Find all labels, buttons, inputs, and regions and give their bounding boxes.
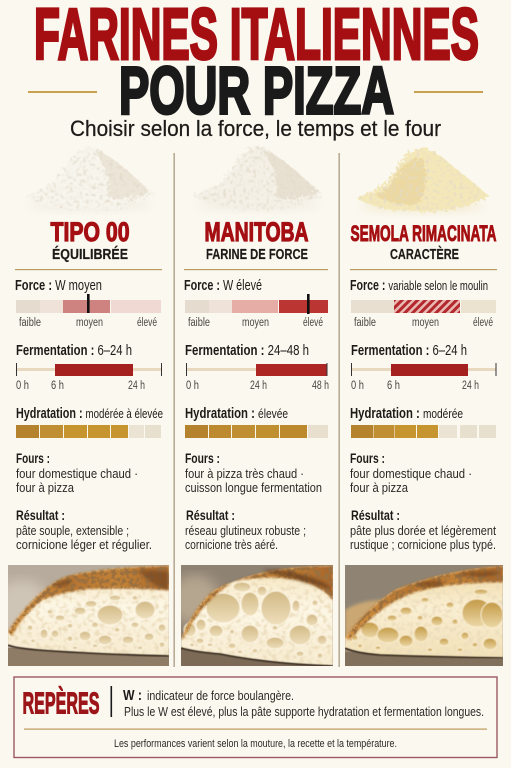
text: W definition: W :	[123, 688, 142, 704]
fermentation timeline: 0 h	[351, 380, 364, 392]
text: résultat	[16, 508, 152, 552]
panel: Manitoba	[170, 147, 333, 666]
icon: flour pile semola	[356, 148, 489, 212]
force gauge: élevé	[137, 317, 157, 329]
fermentation timeline: 24 h	[250, 380, 267, 392]
hydration bar	[16, 406, 163, 438]
name: Manitoba: MANITOBA	[204, 217, 308, 247]
subtitle: caractère: CARACTÈRE	[390, 246, 459, 263]
fermentation timeline: Fermentation : 6–24 h	[351, 343, 467, 359]
fermentation timeline: 48 h	[312, 380, 329, 392]
panel: Tipo 00	[0, 147, 169, 666]
image: bread manitoba	[181, 565, 333, 666]
force gauge	[350, 278, 496, 329]
hydration bar	[350, 406, 496, 438]
force gauge: faible	[354, 317, 376, 329]
text: fours: cuisson longue fermentation	[185, 480, 322, 495]
fermentation timeline: Fermentation : 24–48 h	[185, 343, 309, 359]
force gauge: Force : W moyen	[15, 278, 102, 294]
text: résultat	[185, 508, 306, 552]
text: résultat: cornicione léger et régulier.	[16, 537, 152, 552]
fermentation timeline: 6 h	[51, 380, 64, 392]
fermentation timeline: Fermentation : 6–24 h	[16, 343, 132, 359]
text: W definition: indicateur de force boulangère.	[147, 688, 294, 703]
text: résultat: Résultat :	[186, 508, 235, 523]
force gauge	[15, 278, 161, 329]
footnote: Les performances varient selon la mouture, la recette et la température.	[114, 738, 397, 750]
text: fours	[185, 451, 322, 495]
text: résultat: réseau glutineux robuste ;	[185, 523, 306, 538]
text: fours: four à pizza	[350, 480, 409, 495]
text: résultat	[350, 508, 496, 552]
hydration bar: Hydratation : modérée	[350, 406, 463, 422]
fermentation timeline: 0 h	[16, 380, 29, 392]
text: fours	[16, 451, 138, 495]
hydration bar: Hydratation : élevée	[185, 406, 288, 422]
icon: flour pile manitoba	[193, 147, 323, 210]
fermentation timeline: 0 h	[186, 380, 199, 392]
text: fours: Fours :	[185, 451, 220, 466]
hydration bar: Hydratation : modérée à élevée	[16, 406, 163, 422]
subtitle: Choisir selon la force, le temps et le four	[70, 116, 441, 141]
text: fours: four à pizza	[16, 480, 75, 495]
text: fours: four domestique chaud ·	[350, 466, 472, 481]
force gauge: moyen	[76, 317, 103, 329]
text: fours: Fours :	[16, 451, 50, 466]
fermentation timeline	[351, 343, 496, 392]
panel: repères	[14, 677, 497, 758]
icon: flour pile tipo 00	[25, 147, 155, 210]
force gauge: faible	[188, 317, 210, 329]
force gauge: Force : W élevé	[184, 278, 262, 294]
hydration bar	[185, 406, 328, 438]
subtitle: farine de force: FARINE DE FORCE	[206, 247, 308, 263]
name: Tipo 00: TIPO 00	[50, 217, 130, 247]
text: résultat: pâte souple, extensible ;	[16, 523, 129, 538]
text: fours	[350, 451, 472, 495]
fermentation timeline: 24 h	[462, 380, 479, 392]
fermentation timeline	[185, 343, 329, 392]
text: résultat: Résultat :	[16, 508, 65, 523]
force gauge: élevé	[473, 317, 493, 329]
fermentation timeline: 24 h	[128, 380, 145, 392]
text: fours: Fours :	[350, 451, 385, 466]
title	[28, 0, 483, 128]
image: bread semola	[345, 565, 503, 666]
force gauge	[184, 278, 328, 329]
heading: repères: REPÈRES	[22, 686, 100, 720]
force gauge: faible	[19, 317, 41, 329]
force gauge: élevé	[303, 317, 323, 329]
column dividers	[174, 153, 340, 667]
fermentation timeline	[16, 343, 162, 392]
fermentation timeline: 6 h	[387, 380, 400, 392]
force gauge: moyen	[412, 317, 439, 329]
image: bread tipo 00	[8, 565, 169, 666]
force gauge: moyen	[242, 317, 269, 329]
text: résultat: cornicione très aéré.	[185, 537, 278, 552]
text: W definition	[123, 688, 484, 719]
panel: Semola rimacinata	[345, 148, 503, 666]
text: fours: four domestique chaud ·	[16, 466, 138, 481]
subtitle: équilibrée: ÉQUILIBRÉE	[52, 246, 128, 263]
text: fours: four à pizza très chaud ·	[185, 466, 304, 481]
text: résultat: Résultat :	[351, 508, 400, 523]
